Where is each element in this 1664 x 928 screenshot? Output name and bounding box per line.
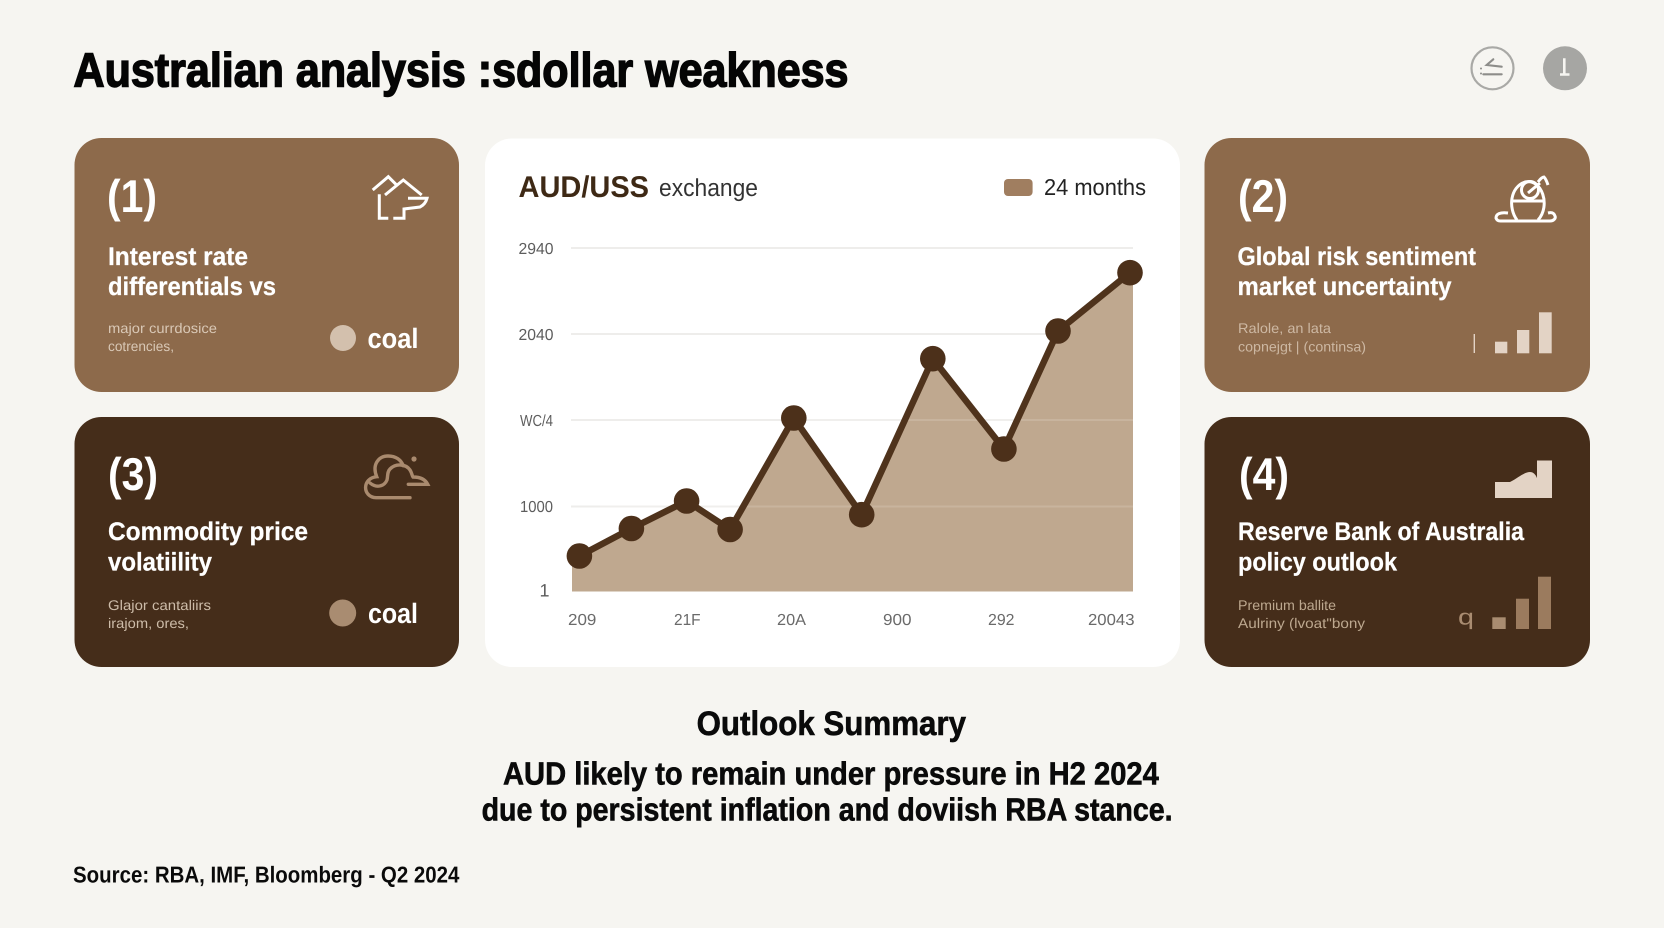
outlook summary text: due to persistent inflation and doviish RBA stance. — [482, 792, 1173, 828]
card 1 dot — [330, 325, 356, 351]
x axis labels — [568, 612, 1135, 629]
card 2 mini bars — [1474, 312, 1552, 353]
panel: card 3 commodity prices — [74, 417, 459, 667]
card 3 coal label: coal — [368, 598, 418, 629]
card 3 heading: volatiility — [108, 548, 213, 576]
source note: Source: RBA, IMF, Bloomberg - Q2 2024 — [73, 862, 460, 888]
panel: card 1 interest rates — [74, 138, 459, 392]
data point markers — [567, 260, 1143, 569]
card 3 note: Glajor cantaliirs — [108, 597, 211, 613]
card 4 small glyph: q — [1458, 604, 1474, 630]
panel: exchange rate chart — [485, 138, 1180, 667]
outlook summary text: AUD likely to remain under pressure in H2 2024 — [503, 755, 1159, 791]
y axis labels: 2040 — [518, 327, 554, 344]
icon: house — [373, 177, 427, 218]
card 3 note: irajom, ores, — [108, 615, 189, 631]
card 1 number: (1) — [107, 170, 157, 222]
panel: card 2 global risk — [1204, 138, 1590, 392]
card 4 heading: policy outlook — [1238, 548, 1398, 576]
card 3 number: (3) — [108, 448, 158, 500]
card 1 note: major currdosice — [108, 320, 217, 336]
card 2 heading: market uncertainty — [1238, 273, 1452, 301]
chart title: exchange — [659, 175, 758, 202]
card 1 heading: Interest rate — [108, 243, 248, 271]
x axis labels: 209 — [568, 612, 596, 629]
x axis labels: 292 — [988, 612, 1015, 629]
chart title: AUD/USS — [518, 171, 649, 204]
card 3 heading: Commodity price — [108, 518, 308, 546]
outlook summary heading: Outlook Summary — [697, 705, 966, 743]
icon: outline menu button — [1472, 47, 1514, 89]
card 4 note: Premium ballite — [1238, 597, 1336, 613]
title: Australian analysis :sdollar weakness — [74, 45, 848, 98]
card 4 number: (4) — [1239, 448, 1289, 500]
y axis labels — [518, 241, 554, 600]
card 4 mini bars — [1492, 577, 1551, 629]
y axis labels: WC/4 — [520, 413, 553, 430]
line series — [579, 273, 1130, 556]
card 2 heading: Global risk sentiment — [1238, 243, 1476, 271]
icon: filled download button — [1543, 46, 1587, 90]
icon: cloud — [366, 456, 428, 498]
y axis labels: 1 — [540, 580, 550, 600]
card 2 note: copnejgt | (continsa) — [1238, 338, 1366, 354]
card 1 note: cotrencies, — [108, 338, 174, 354]
panel: card 4 RBA policy — [1204, 417, 1590, 667]
chart legend: 24 months — [1044, 174, 1146, 200]
x axis labels: 20A — [777, 612, 806, 629]
icon: area shape — [1495, 460, 1552, 498]
y axis labels: 2940 — [518, 241, 554, 258]
y axis labels: 1000 — [520, 499, 553, 516]
chart title — [518, 171, 758, 204]
x axis labels: 21F — [674, 612, 701, 629]
card 3 dot — [329, 600, 356, 626]
card 2 note: Ralole, an lata — [1238, 320, 1331, 336]
area under line — [572, 272, 1133, 592]
card 1 coal label: coal — [368, 323, 418, 354]
card 1 heading: differentials vs — [108, 273, 276, 301]
card 2 number: (2) — [1238, 170, 1288, 222]
x axis labels: 20043 — [1088, 612, 1135, 629]
card 4 note: Aulriny (lvoat"bony — [1238, 615, 1365, 631]
x axis labels: 900 — [883, 612, 912, 629]
chart legend — [1004, 174, 1146, 200]
icon: globe on base — [1496, 177, 1555, 221]
card 4 heading: Reserve Bank of Australia — [1238, 518, 1525, 546]
